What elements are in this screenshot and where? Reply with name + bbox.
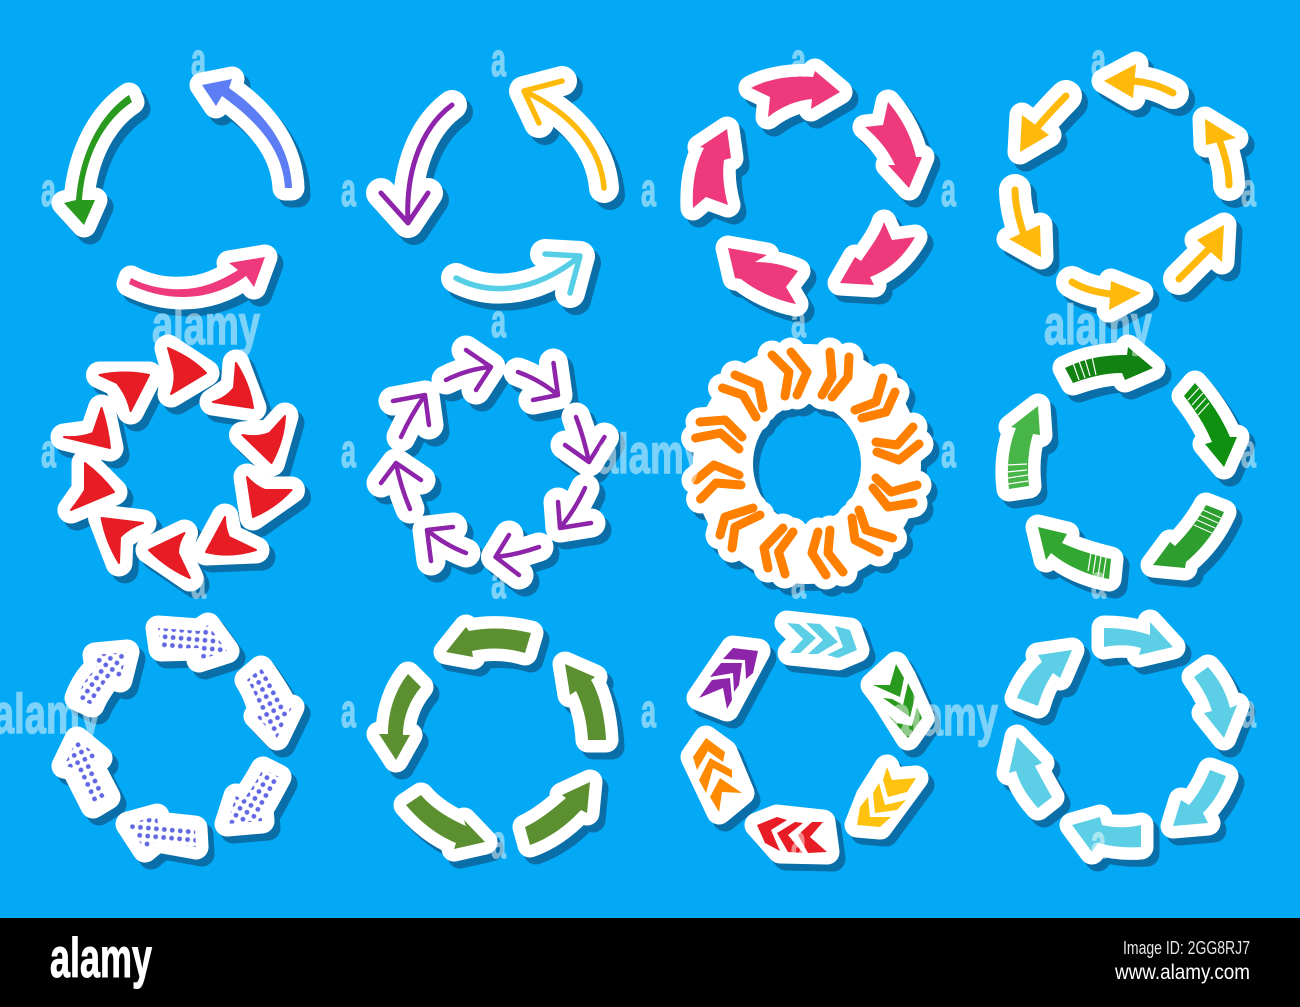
arrow: yellow [524, 81, 604, 188]
dart 10 [64, 408, 110, 448]
arrow: top [1065, 347, 1153, 383]
ring 7: orange double-chevron wreath [696, 352, 919, 575]
dart 3 [213, 363, 253, 408]
watermark letters and wordmarks: alamy [597, 422, 705, 485]
arrow: lower right [1153, 505, 1224, 568]
white sticker backing [64, 348, 292, 578]
ring 2: three open-head line arrows [381, 81, 604, 293]
chevrons: yellow lower right [857, 767, 916, 827]
arrow: left [1007, 406, 1040, 489]
arrow: top [1104, 622, 1173, 655]
image id: Image ID: 2GG8RJ7 [1123, 938, 1250, 958]
dart 6 [206, 517, 256, 555]
watermark letters and wordmarks: a [1091, 33, 1106, 86]
footer bar [0, 918, 1300, 1007]
watermark letters and wordmarks: a [41, 163, 56, 216]
ring 3: five pink notched arrows [693, 71, 922, 304]
arrow: left [379, 674, 421, 760]
ring 8: five green striped arrows [1007, 347, 1237, 579]
ring 5: ten red darts [64, 348, 292, 578]
footer logo: alamy [50, 926, 152, 989]
dart 8 [102, 518, 143, 563]
watermark letters and wordmarks: a [341, 424, 356, 477]
white sticker backing [693, 623, 922, 852]
watermark letters and wordmarks: a [641, 684, 656, 737]
watermark letters and wordmarks: a [641, 163, 656, 216]
arrow: left [64, 739, 108, 806]
chevrons: purple upper left [699, 648, 758, 709]
arrow: lower left [728, 248, 798, 304]
watermark letters and wordmarks: a [1241, 684, 1256, 737]
arrow: teal [456, 254, 580, 293]
arrow: lower right [1173, 770, 1226, 826]
dart 7 [149, 533, 190, 578]
watermark letters and wordmarks: a [41, 424, 56, 477]
website: www.alamy.com [1114, 961, 1250, 984]
chevrons: red bottom [757, 817, 827, 853]
arrow: pink [129, 257, 265, 297]
arrow: right [1184, 383, 1237, 467]
dart 9 [71, 463, 114, 510]
white annulus backing [723, 374, 891, 554]
watermark letters and wordmarks: a [491, 33, 506, 86]
arrow: green [64, 95, 132, 225]
watermark letters and wordmarks: a [941, 424, 956, 477]
watermark letters and wordmarks: a [1091, 555, 1106, 608]
arrow: upper left [77, 652, 127, 705]
ring 11: six multi-colour chevron arrows [693, 623, 922, 853]
arrow: right [247, 668, 292, 738]
watermark letters and wordmarks: a [191, 33, 206, 86]
watermark letters and wordmarks: a [791, 555, 806, 608]
arrow: left [1009, 737, 1052, 808]
arrow: bottom [1072, 281, 1141, 310]
watermark letters and wordmarks: a [341, 163, 356, 216]
watermark letters and wordmarks: alamy [152, 293, 260, 356]
chevrons: orange left [693, 738, 742, 812]
watermark letters and wordmarks: a [491, 294, 506, 347]
watermark letters and wordmarks: alamy [1044, 293, 1152, 356]
arrow: top [751, 71, 840, 117]
orange chevrons [696, 352, 919, 575]
chevrons: green right [873, 664, 922, 738]
watermark letters and wordmarks: alamy [890, 684, 998, 747]
arrow: right [1194, 667, 1237, 738]
watermark letters and wordmarks: a [791, 33, 806, 86]
ring 9: six dotted arrows [64, 625, 292, 850]
watermark letters and wordmarks: a [1241, 163, 1256, 216]
ring 4: six yellow arrows [1009, 64, 1236, 310]
red darts [64, 348, 292, 578]
arrow: lower left [1009, 190, 1041, 257]
dart 4 [242, 416, 285, 463]
watermark letters and wordmarks: a [491, 815, 506, 868]
arrow: upper left [1020, 96, 1066, 152]
dart 1 [100, 372, 149, 411]
ring 1: three solid-head thin arrows [64, 79, 292, 297]
watermark letters and wordmarks: a [191, 555, 206, 608]
arrow: right [865, 102, 922, 188]
watermark letters and wordmarks: a [1241, 424, 1256, 477]
arrow: top [158, 625, 227, 660]
arrow: left [693, 129, 731, 208]
arrow: upper left [1017, 650, 1072, 706]
arrow: lower right [840, 222, 915, 285]
white sticker scallops [696, 352, 919, 575]
watermark letters and wordmarks: a [941, 163, 956, 216]
arrow: top [1104, 64, 1173, 98]
arrow: top [446, 627, 531, 657]
chevrons: teal top [787, 623, 857, 658]
ring 6: eight purple line arrows [381, 350, 604, 575]
watermark letters and wordmarks: a [791, 815, 806, 868]
arrow: right [565, 664, 606, 740]
arrow: lower right [525, 782, 590, 845]
dart 5 [247, 477, 292, 517]
dart 2 [168, 348, 206, 394]
arrow: bottom [406, 795, 485, 849]
arrow: lower left [1038, 527, 1111, 579]
arrow: blue [202, 79, 292, 188]
ring 12: six light teal arrows [1009, 622, 1237, 852]
watermark letters and wordmarks: a [491, 555, 506, 608]
arrow: lower right [1179, 225, 1224, 279]
arrow: bottom [1072, 817, 1141, 852]
arrow: lower right [227, 769, 279, 824]
purple arrow strokes [381, 350, 604, 575]
ring 10: five olive arrows [379, 627, 606, 849]
watermark letters and wordmarks: a [341, 684, 356, 737]
watermark letters and wordmarks: a [1091, 815, 1106, 868]
white sticker backing [381, 350, 604, 575]
arrow: purple [381, 105, 452, 223]
watermark letters and wordmarks: a [791, 294, 806, 347]
arrow: upper right [1205, 119, 1236, 185]
arrow: bottom [128, 816, 196, 850]
